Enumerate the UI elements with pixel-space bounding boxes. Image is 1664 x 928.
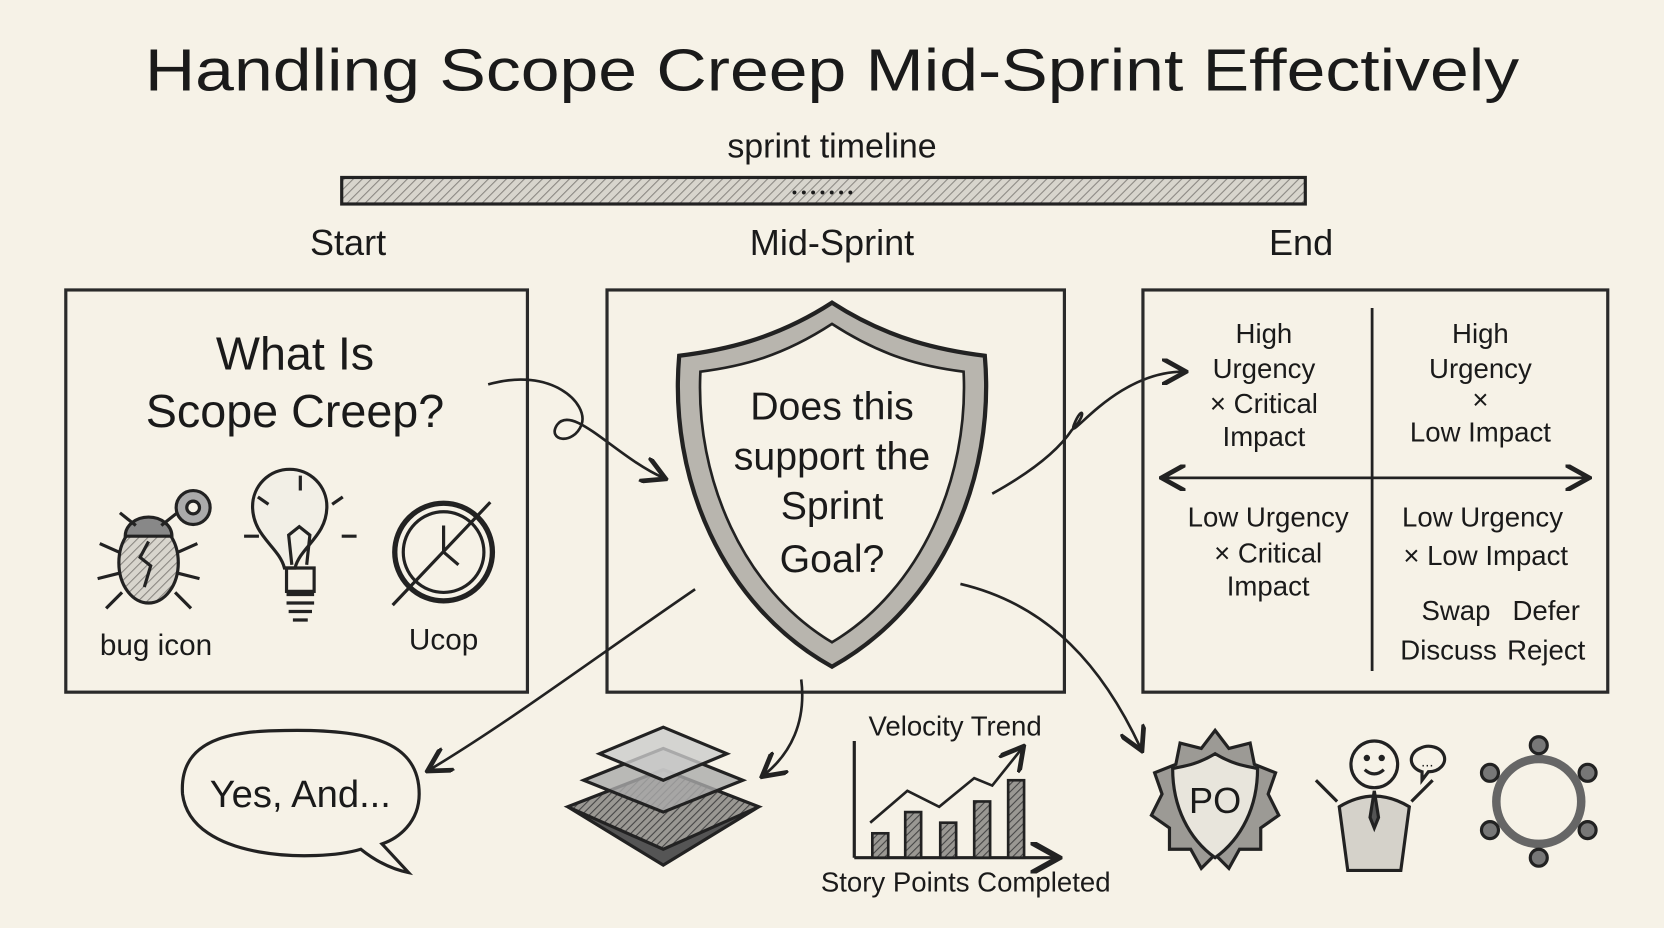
- shield text: Sprint: [781, 484, 883, 528]
- quadrant labels: [1188, 318, 1586, 665]
- shield text: support the: [734, 434, 930, 478]
- shield text: Goal?: [780, 537, 884, 581]
- quadrant labels: × Critical: [1214, 538, 1322, 569]
- shield text: [734, 384, 930, 581]
- arrow: shield to matrix: [992, 372, 1183, 494]
- quadrant labels: Reject: [1507, 634, 1586, 665]
- quadrant labels: × Critical: [1210, 388, 1318, 419]
- timeline labels: [310, 222, 1333, 263]
- timeline labels: Start: [310, 222, 386, 263]
- title: Handling Scope Creep Mid-Sprint Effectively: [145, 36, 1519, 103]
- shield: [678, 303, 986, 667]
- quadrant labels: Low Urgency: [1188, 502, 1349, 533]
- quadrant labels: Low Impact: [1410, 417, 1551, 448]
- panel: urgency impact matrix: [1143, 290, 1608, 692]
- icon: PO badge: [1151, 730, 1279, 868]
- panel: what is scope creep: Scope Creep?: [146, 385, 444, 437]
- quadrant labels: Defer: [1512, 595, 1580, 626]
- timeline label: sprint timeline: [727, 127, 937, 165]
- icon: bug: [98, 491, 210, 608]
- quadrant labels: Impact: [1227, 571, 1310, 602]
- quadrant labels: Discuss: [1400, 634, 1497, 665]
- timeline labels: Mid-Sprint: [750, 222, 914, 263]
- panel: what is scope creep: [66, 290, 527, 692]
- quadrant labels: Low Urgency: [1402, 502, 1563, 533]
- timeline bar: • • • • • • •: [792, 186, 853, 202]
- speech bubble: yes and: Yes, And...: [210, 773, 391, 816]
- quadrant labels: High: [1452, 318, 1509, 349]
- timeline labels: End: [1269, 222, 1333, 263]
- icon: crossed clock: [393, 502, 492, 605]
- chart: velocity trend: Velocity Trend: [868, 711, 1042, 742]
- icon: light bulb: [244, 469, 357, 620]
- panel: what is scope creep: Ucop: [409, 624, 478, 657]
- quadrant labels: ×: [1472, 384, 1488, 415]
- icon: person speaking: [1316, 741, 1445, 870]
- arrows: to bottom icons: [430, 584, 1141, 775]
- timeline bar: [342, 177, 1305, 204]
- shield text: Does this: [750, 384, 914, 428]
- quadrant labels: Urgency: [1213, 353, 1315, 384]
- speech bubble: yes and: [182, 730, 419, 873]
- quadrant labels: Impact: [1223, 421, 1306, 452]
- arrow: scope creep to shield: [488, 380, 663, 478]
- icon: team circle: [1481, 737, 1596, 866]
- quadrant labels: Swap: [1421, 595, 1490, 626]
- quadrant labels: High: [1236, 318, 1292, 349]
- icon: person speaking: ...: [1421, 754, 1434, 770]
- chart: velocity trend: [821, 711, 1111, 898]
- panel: decision shield: [607, 290, 1064, 692]
- icon: PO badge: PO: [1189, 780, 1241, 821]
- quadrant labels: × Low Impact: [1403, 540, 1568, 571]
- chart: velocity trend: Story Points Completed: [821, 867, 1111, 898]
- heading: What Is: [216, 328, 374, 380]
- axes: [1164, 308, 1587, 671]
- quadrant labels: Urgency: [1429, 353, 1532, 384]
- icon: stacked layers: [568, 727, 759, 865]
- icon labels: bug icon: [100, 629, 212, 662]
